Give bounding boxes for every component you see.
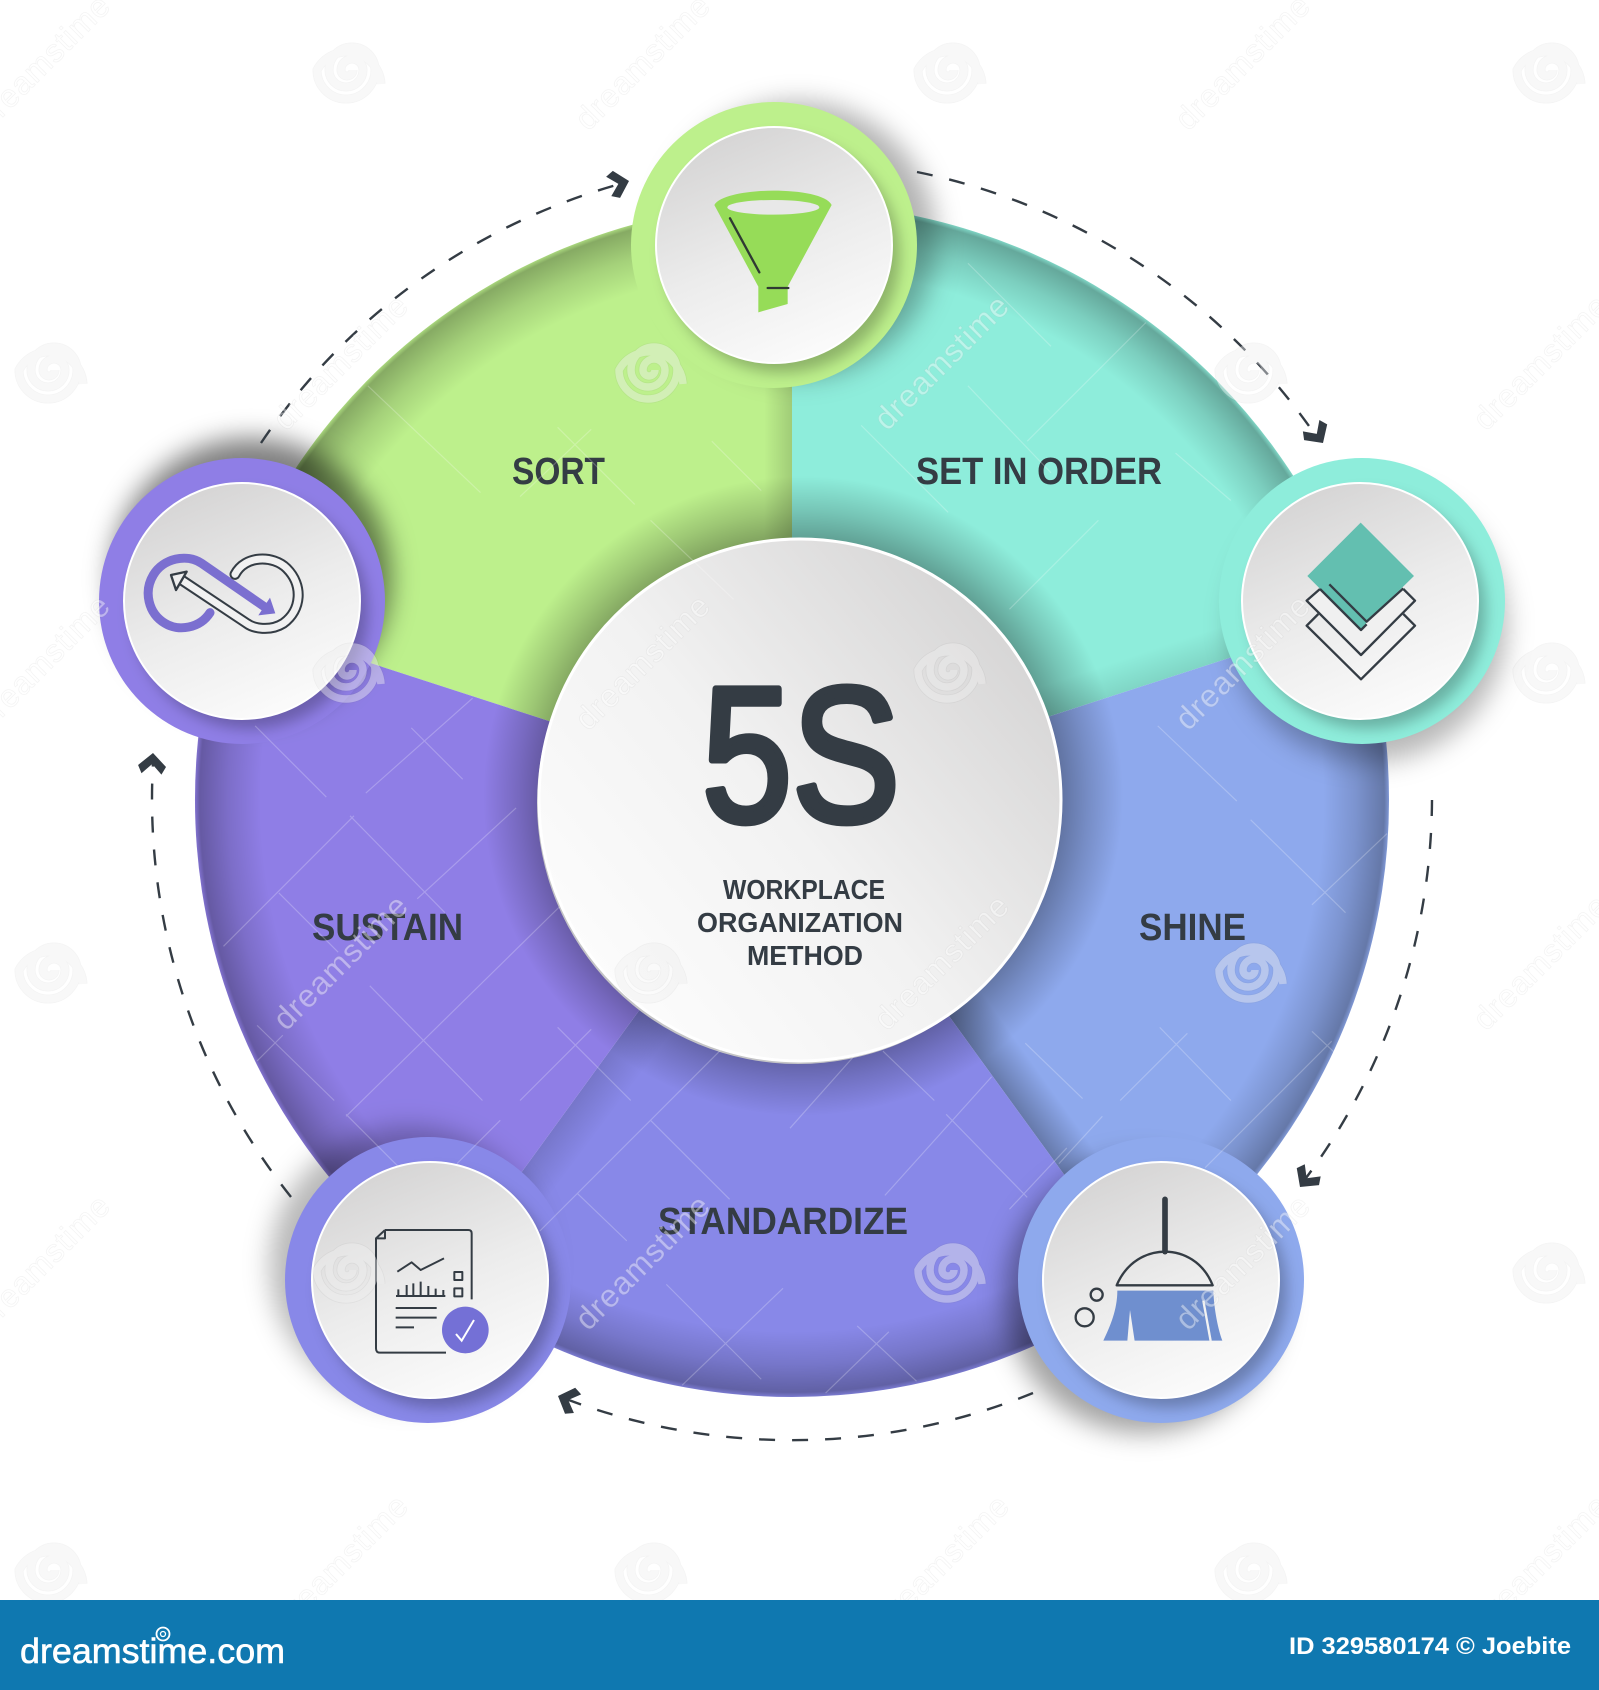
- watermark overlay: dreamstime: [266, 1488, 415, 1637]
- watermark overlay: dreamstime: [568, 1188, 717, 1337]
- arrow: standardize to sustain: [137, 752, 291, 1197]
- wedge: set in order: [792, 203, 1360, 800]
- arrow: sort to set in order: [917, 172, 1335, 451]
- watermark overlay: dreamstime: [568, 588, 717, 737]
- center disc: [537, 539, 1061, 1064]
- watermark overlay: dreamstime: [1168, 588, 1317, 737]
- wedge: standardize: [441, 800, 1143, 1397]
- subtitle: workplace organization method: [697, 874, 903, 971]
- footer id credit: ID 329580174 © Joebite: [1289, 1633, 1571, 1660]
- label: sort: SORT: [512, 451, 605, 493]
- arrow: set in order to shine: [1289, 800, 1432, 1195]
- label: sustain: SUSTAIN: [312, 907, 463, 949]
- wedge: shine: [792, 616, 1389, 1283]
- arrow: sustain to sort: [261, 167, 633, 443]
- badge: sustain infinity: [99, 458, 385, 744]
- watermark overlay: dreamstime: [867, 1488, 1016, 1637]
- title: 5S: 5S: [702, 647, 900, 862]
- watermark overlay: dreamstime: [1168, 1188, 1317, 1337]
- subtitle: workplace organization method: WORKPLACE: [723, 874, 885, 905]
- wedge: sort: [224, 203, 792, 800]
- label: set in order: SET IN ORDER: [916, 451, 1162, 493]
- watermark overlay: dreamstime: [867, 888, 1016, 1037]
- watermark overlay: dreamstime: [266, 888, 415, 1037]
- badge: sort funnel: [631, 102, 917, 388]
- icon: report document: [376, 1230, 489, 1353]
- label: shine: SHINE: [1139, 907, 1246, 949]
- watermark overlay: dreamstime: [867, 288, 1016, 437]
- icon: infinity arrows: [148, 558, 298, 628]
- watermark overlay: dreamstime: [266, 288, 415, 437]
- footer bar: [0, 1600, 1599, 1690]
- footer brand: dreamstime.com: [20, 1632, 285, 1671]
- subtitle: workplace organization method: METHOD: [747, 940, 863, 971]
- badge: shine broom: [1018, 1137, 1304, 1423]
- icon: broom: [1076, 1199, 1222, 1341]
- icon: layers: [1307, 523, 1415, 679]
- badge: set in order layers: [1219, 458, 1505, 744]
- label: standardize: STANDARDIZE: [658, 1201, 908, 1243]
- icon: funnel: [714, 191, 832, 312]
- wedge: sustain: [195, 616, 792, 1283]
- subtitle: workplace organization method: ORGANIZATION: [697, 907, 903, 938]
- arrow: shine to standardize: [553, 1383, 1033, 1440]
- badge: standardize document: [285, 1137, 571, 1423]
